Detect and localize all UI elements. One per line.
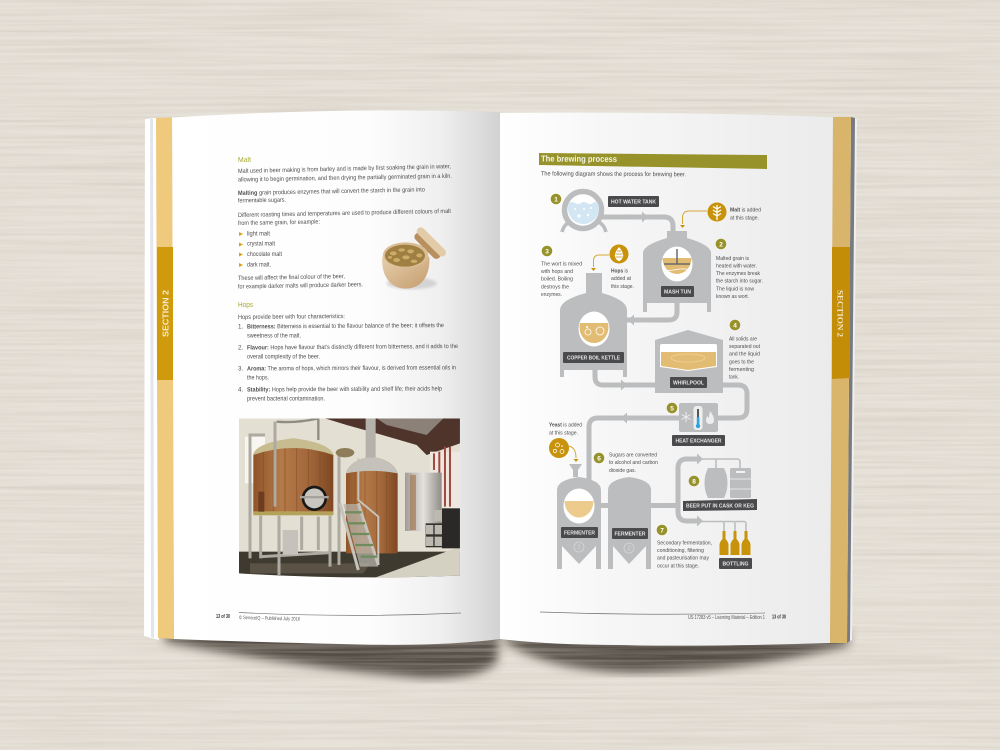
step 3 badge: 3: [545, 248, 549, 255]
section label: SECTION 2: [836, 290, 844, 337]
intro text: The following diagram shows the process for brewing beer.: [541, 171, 686, 178]
text: hops added: Hops is: [611, 268, 628, 274]
text: step 6: dioxide gas.: [609, 468, 636, 474]
text: step 2: The enzymes break: [716, 271, 760, 277]
heading bar: [539, 153, 767, 169]
text: step 7: occur at this stage.: [657, 564, 699, 570]
text: step 2: the starch into sugar.: [716, 278, 763, 284]
panel: left page: [156, 110, 500, 645]
hops list: sweetness of the malt.: [247, 332, 301, 340]
text: step 2: [716, 256, 763, 300]
label: mash tun: [661, 286, 694, 297]
mash tun: [643, 231, 711, 312]
malting paragraph: [238, 186, 425, 204]
step 5 badge: [667, 403, 677, 413]
hops list: Stability: Hops help provide the beer with stability and shelf life; their acids help: [247, 385, 443, 393]
roasting paragraph: [238, 208, 451, 227]
text: step 4: fermenting: [729, 367, 754, 373]
step 5 badge: 5: [670, 405, 674, 412]
label: cask or keg: BEER PUT IN CASK OR KEG: [686, 504, 754, 510]
step 2 badge: 2: [719, 241, 723, 248]
page edge dark right: [847, 117, 855, 643]
right side tab: [830, 117, 851, 643]
footer right: US 17283 v5 – Learning Material – Edition 1: [688, 615, 765, 621]
malt list: [239, 230, 282, 268]
fermenter 1: 1: [577, 545, 581, 551]
text: step 3: destroys the: [541, 284, 569, 290]
text: step 2: The liquid is now: [716, 286, 754, 292]
footer left: © ServiceIQ – Published July 2016: [239, 614, 300, 623]
footer right: [540, 612, 786, 621]
whirlpool: [655, 330, 723, 393]
label: bottling: [719, 558, 752, 569]
hops list: overall complexity of the beer.: [247, 354, 320, 360]
hops list: Flavour: Hops have flavour that’s distinctly different from bitterness, and it adds to the: [247, 343, 459, 351]
icon: malt: [680, 202, 726, 228]
step 6 badge: [594, 453, 604, 463]
label: hot water tank: HOT WATER TANK: [611, 200, 656, 206]
hops list: 4.: [238, 386, 243, 394]
step 1 badge: [551, 194, 561, 204]
pipe arrows: [621, 212, 703, 526]
label: copper boil kettle: COPPER BOIL KETTLE: [567, 356, 620, 362]
text: hops added: this stage.: [611, 284, 634, 290]
text: yeast added: [549, 422, 582, 436]
page edge tint left: [150, 119, 154, 638]
icon: yeast: [549, 438, 578, 462]
icon: keg: [730, 468, 751, 498]
step 8 badge: [689, 476, 699, 486]
footer left: 13 of 30: [216, 614, 230, 620]
text: step 3: The wort is mixed: [541, 262, 582, 268]
fermenter 1: [557, 464, 601, 569]
text: step 4: All solids are: [729, 336, 757, 342]
icon: wooden bowl of malt: [382, 226, 448, 289]
malt list: chocolate malt: [247, 251, 282, 258]
label: mash tun: MASH TUN: [664, 290, 691, 296]
hops list: [238, 322, 459, 402]
text: step 2: heated with water.: [716, 264, 757, 270]
label: heat exchanger: HEAT EXCHANGER: [676, 438, 722, 444]
label: bottling: BOTTLING: [722, 562, 748, 568]
text: step 3: with hops and: [540, 269, 573, 275]
text: hops added: added at: [611, 276, 631, 282]
icon: bottles: [720, 531, 750, 555]
hops list: prevent bacterial contamination.: [247, 396, 325, 402]
hops list: 3.: [238, 366, 243, 372]
hops list: Bitterness: Bitterness is essential to the flavour balance of the beer; it offsets the: [247, 322, 444, 330]
text: step 6: [609, 452, 658, 474]
step 4 badge: 4: [733, 322, 737, 329]
hops list: Aroma: The aroma of hops, which mirrors their flavour, is derived from essential oils in: [247, 364, 456, 372]
fermenter 2: [608, 477, 651, 569]
malting paragraph: Malting grain produces enzymes that will convert the starch in the grain into: [238, 186, 425, 197]
hops list: 2.: [238, 344, 243, 352]
text: malt added: [730, 208, 761, 222]
panel: right page: [500, 112, 851, 646]
text: step 2: Malted grain is: [716, 256, 749, 262]
text: step 6: Sugars are converted: [609, 452, 657, 458]
text: step 4: tank.: [729, 374, 739, 380]
beer colour paragraph: These will affect the final colour of the beer,: [238, 273, 345, 282]
label: copper boil kettle: [563, 352, 624, 363]
malt list: dark malt.: [247, 262, 271, 268]
heat exchanger: [679, 403, 718, 432]
malt intro paragraph: Malt used in beer making is from barley and is made by first soaking the grain in water,: [238, 163, 451, 175]
step 2 badge: [716, 239, 726, 249]
heading text: The brewing process: [541, 154, 617, 164]
text: malt added: at this stage.: [730, 216, 759, 222]
hops intro: Hops provide beer with four characteristics:: [238, 313, 345, 321]
beer colour paragraph: for example darker malts will produce darker beers.: [238, 281, 363, 290]
text: step 4: separated out: [729, 344, 760, 350]
hot water tank: [562, 192, 606, 232]
label: whirlpool: [670, 377, 707, 388]
text: step 4: goes to the: [729, 360, 754, 366]
text: step 6: to alcohol and carbon: [609, 460, 658, 466]
text: step 3: boiled. Boiling: [541, 276, 573, 282]
copper boil kettle: [560, 273, 627, 377]
heading: malt: Malt: [238, 157, 251, 164]
fermenter 2: 2: [627, 546, 631, 552]
photo: brewery tanks: [239, 418, 460, 580]
text: step 7: Secondary fermentation,: [657, 540, 712, 546]
hops list: 1.: [238, 324, 243, 330]
text: step 4: and the liquid: [729, 352, 760, 358]
malting paragraph: fermentable sugars.: [238, 197, 286, 204]
heading: hops: Hops: [238, 302, 253, 309]
thin filling lines: [700, 459, 746, 532]
label: cask or keg: [683, 499, 757, 511]
text: yeast added: at this stage.: [549, 430, 578, 436]
section label: SECTION 2: [162, 289, 170, 337]
hops list: the hops.: [247, 374, 269, 382]
label: fermenter 2: [612, 528, 648, 539]
section block: [157, 247, 173, 380]
pipes: [589, 217, 747, 521]
malt intro paragraph: allowing it to begin germination, and then drying the partially germinated grain in a kiln.: [238, 173, 452, 183]
step 4 badge: [730, 320, 740, 330]
text: yeast added: Yeast is added: [549, 422, 582, 428]
label: whirlpool: WHIRLPOOL: [673, 380, 705, 386]
step 7 badge: 7: [660, 527, 664, 534]
beer colour paragraph: [238, 273, 363, 290]
step 3 badge: [542, 246, 552, 256]
roasting paragraph: from the same grain, for example:: [238, 219, 320, 227]
text: step 2: known as wort.: [716, 294, 749, 300]
text: step 4: [729, 336, 760, 380]
label: heat exchanger: [672, 435, 725, 446]
roasting paragraph: Different roasting times and temperatures are used to produce different colours of malt: [238, 208, 451, 219]
left side tab: [156, 118, 174, 639]
section block: [832, 247, 850, 379]
text: step 7: [657, 540, 712, 570]
step 1 badge: 1: [554, 196, 558, 203]
step 7 badge: [657, 525, 667, 535]
step 6 badge: 6: [597, 455, 601, 462]
page edges left: [144, 118, 159, 640]
label: fermenter 1: [561, 527, 598, 538]
footer left: [216, 612, 461, 623]
book shadow: [165, 630, 848, 678]
icon: cask: [704, 468, 728, 498]
label: hot water tank: [608, 196, 659, 207]
text: step 7: and pasteurisation may: [657, 556, 709, 562]
label: fermenter 1: FERMENTER: [564, 530, 595, 536]
icon: hops: [591, 244, 628, 271]
text: step 7: conditioning, filtering: [657, 548, 704, 554]
step 8 badge: 8: [692, 478, 696, 485]
malt list: crystal malt: [247, 240, 275, 248]
text: step 3: enzymes.: [541, 292, 562, 298]
malt list: light malt: [247, 230, 270, 238]
text: step 3: [540, 262, 582, 298]
text: hops added: [611, 268, 634, 290]
footer right: 13 of 30: [772, 614, 786, 620]
text: malt added: Malt is added: [730, 208, 761, 214]
label: fermenter 2: FERMENTER: [614, 532, 646, 538]
malt intro paragraph: [238, 163, 452, 183]
page edges right: [847, 117, 857, 643]
